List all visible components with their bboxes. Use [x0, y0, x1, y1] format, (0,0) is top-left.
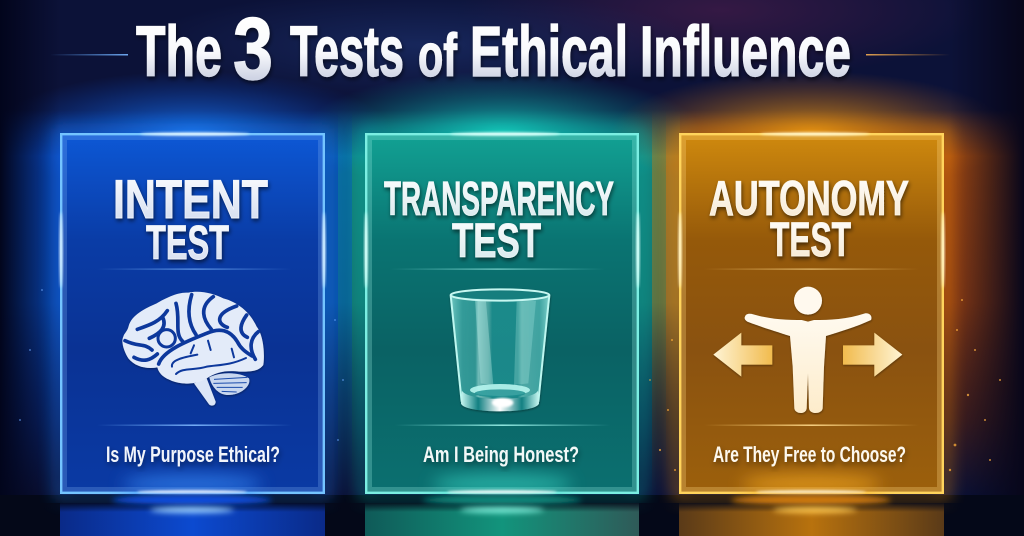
card 1 glow	[58, 131, 327, 496]
icon: glass	[451, 289, 549, 411]
heading: transparency test: TRANSPARENCY	[384, 173, 614, 226]
title rule right	[866, 54, 950, 56]
heading: intent test: TEST	[146, 217, 229, 270]
title: Ethical	[470, 13, 628, 92]
panel: transparency test	[363, 131, 641, 496]
icon: brain	[122, 292, 264, 406]
card 2 glow	[363, 131, 641, 496]
caption: is my purpose ethical: Is My Purpose Ethical?	[106, 442, 280, 467]
panel: autonomy test	[677, 131, 946, 496]
title	[136, 0, 851, 98]
divider	[704, 268, 919, 270]
title: Influence	[640, 13, 851, 92]
card 3 frame	[678, 132, 944, 494]
heading: transparency test: TEST	[452, 215, 541, 268]
heading: autonomy test	[709, 172, 909, 267]
title: Tests	[290, 13, 404, 92]
card 1 frame	[60, 132, 326, 494]
heading: intent test: INTENT	[113, 168, 268, 230]
card 2 body	[365, 133, 639, 494]
title: 3	[233, 0, 273, 98]
title: The	[136, 13, 222, 92]
heading: transparency test	[384, 173, 614, 268]
icon: person with arrows	[713, 287, 902, 413]
heading: autonomy test: TEST	[770, 214, 851, 267]
card 3 glow	[677, 131, 946, 496]
heading: intent test	[113, 168, 268, 270]
particles	[19, 289, 1001, 471]
divider	[704, 424, 919, 426]
card 3 body	[679, 133, 944, 494]
card 1 body	[60, 133, 325, 494]
divider	[395, 424, 610, 426]
title: of	[418, 22, 458, 89]
panel: intent test	[58, 131, 327, 496]
card 2 frame	[364, 132, 640, 494]
caption: are they free to choose: Are They Free to Choose?	[713, 442, 906, 467]
divider	[390, 268, 605, 270]
title rule left	[50, 54, 128, 56]
heading: autonomy test: AUTONOMY	[709, 172, 909, 226]
divider	[97, 424, 292, 426]
floor reflections	[0, 495, 1024, 536]
divider	[97, 268, 292, 270]
caption: am i being honest: Am I Being Honest?	[423, 442, 579, 467]
